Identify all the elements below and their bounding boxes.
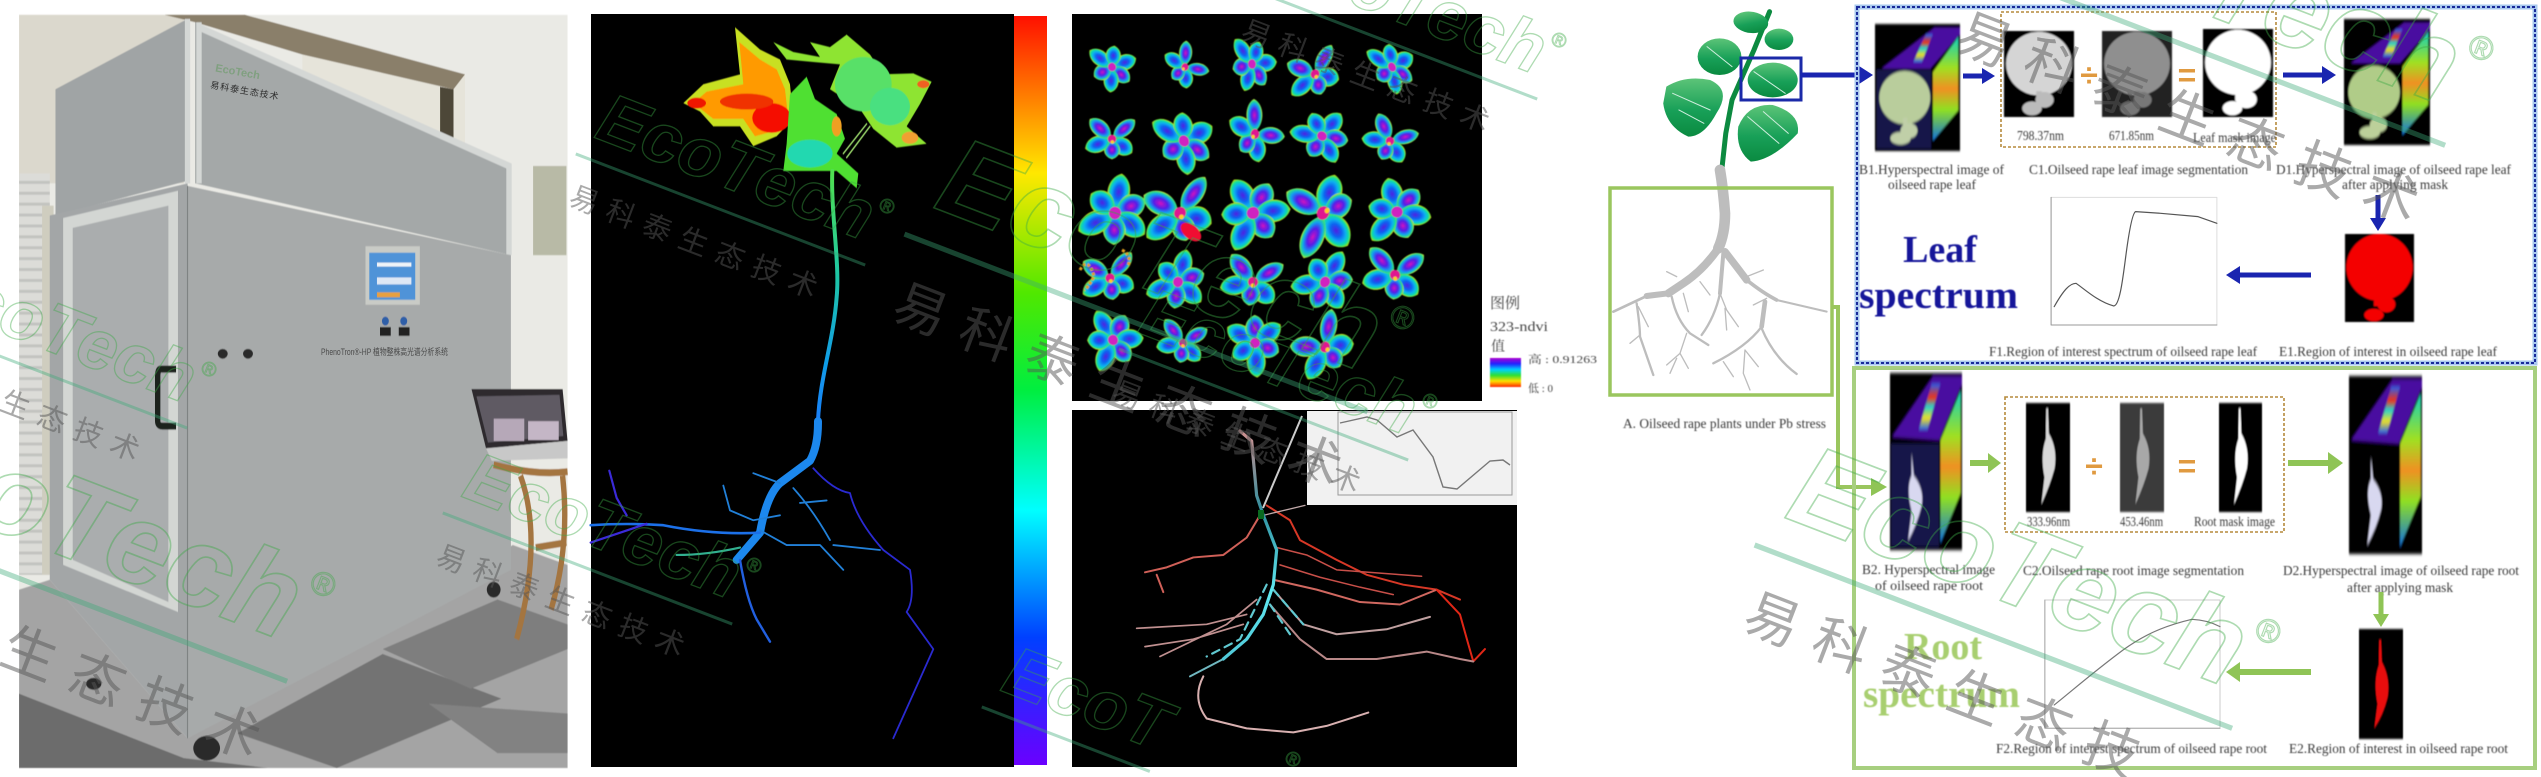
watermark: large right upper: ® — [2463, 26, 2499, 70]
arrow down — [2370, 195, 2386, 231]
arrow left — [2226, 662, 2311, 682]
captions row two: E2.Region of interest in oilseed rape root — [2289, 742, 2508, 757]
watermark: small over rosettes: ® — [1419, 389, 1441, 415]
C2 labels: Root mask image — [2194, 515, 2275, 530]
C1 labels: 671.85nm — [2109, 129, 2154, 144]
root spectrum title: spectrum — [1863, 673, 2020, 716]
D2 masked root cube — [2349, 376, 2422, 554]
watermark: top centre: 易科泰生态技术 — [1237, 14, 1503, 143]
pointer arrow — [1263, 416, 1302, 508]
watermark: small over plant panel top: EcoTech — [588, 78, 886, 255]
captions row one: of oilseed rape root — [1875, 579, 1983, 594]
stem — [1721, 12, 1770, 173]
machine brand plate — [210, 62, 283, 102]
watermark: small over plant panel roots: EcoTech — [455, 437, 753, 614]
captions row two: F2.Region of interest spectrum of oilseed rape root — [1996, 742, 2267, 757]
watermark: small over plant panel roots — [422, 434, 769, 680]
machine name label: PhenoTron®-HP 植物整株高光谱分析系统 — [321, 346, 448, 357]
touch screen — [365, 246, 420, 305]
watermark: top centre — [1227, 0, 1574, 155]
plant rosettes — [1064, 28, 1442, 390]
watermark: small over rosettes: EcoTech — [1131, 273, 1429, 450]
watermark: large across centre: ® — [1385, 297, 1420, 339]
C1 labels: Leaf mask image — [2193, 131, 2276, 146]
watermark: small over rosettes: 易科泰生态技术 — [1108, 375, 1374, 504]
watermark: small over photo: ® — [198, 357, 220, 383]
equals sign: = — [2178, 57, 2196, 93]
equals sign: = — [2178, 448, 2196, 484]
leaf spectrum title — [1859, 229, 2018, 317]
arrow down — [2373, 592, 2389, 627]
C2 root mask — [2219, 403, 2262, 512]
stem and roots — [591, 171, 933, 738]
watermark: small over plant panel top: 易科泰生态技术 — [565, 180, 831, 309]
root system — [1137, 431, 1485, 732]
legend: 图例 — [1490, 295, 1520, 312]
leaf veins — [1673, 47, 1788, 143]
legend: 低 : 0 — [1528, 382, 1554, 395]
divide sign: ÷ — [2085, 448, 2103, 484]
knobs and holes — [218, 317, 409, 359]
legend — [1490, 295, 1598, 395]
arrow — [1970, 453, 2001, 473]
panel: root spectrum workflow — [1854, 368, 2535, 768]
captions row one: after applying mask — [2347, 581, 2453, 596]
watermark: large across centre — [870, 107, 1428, 505]
machine brand plate: 易科泰生态技术 — [210, 79, 280, 102]
C2 labels: 333.96nm — [2027, 515, 2070, 530]
icon: machine upper left cover — [55, 19, 188, 216]
watermark: small over plant panel top — [555, 75, 902, 321]
panel: workflow plant illustration — [1663, 9, 1798, 173]
C1 image 798 nm — [2004, 31, 2074, 117]
C2 image one — [2026, 403, 2070, 512]
captions row one: B1.Hyperspectral image of — [1859, 163, 2004, 178]
C2 image two — [2120, 403, 2164, 512]
box: roots frame — [1610, 188, 1832, 395]
root spectrum title: Root — [1904, 626, 1982, 668]
door handle — [158, 369, 176, 426]
F2 spectrum chart — [2045, 600, 2220, 728]
panel: instrument photo — [19, 15, 568, 768]
watermark: large over photo — [0, 367, 350, 777]
captions row two — [1989, 345, 2497, 360]
gray root system — [1613, 170, 1827, 390]
watermark: small over plant panel roots: ® — [743, 553, 765, 579]
captions row two: E1.Region of interest in oilseed rape leaf — [2279, 345, 2497, 360]
caption A: A. Oilseed rape plants under Pb stress — [1623, 417, 1826, 432]
captions row one: C2.Oilseed rape root image segmentation — [2023, 564, 2244, 579]
watermark: large right lower — [1721, 414, 2293, 777]
captions row two: F1.Region of interest spectrum of oilseed rape leaf — [1989, 345, 2257, 360]
watermark: large across centre: EcoTech — [923, 113, 1400, 395]
captions row one: D2.Hyperspectral image of oilseed rape root — [2283, 564, 2519, 579]
aluminium frame — [188, 19, 509, 255]
C1 labels: 798.37nm — [2017, 129, 2064, 144]
watermark: large across centre: 易科泰生态技术 — [885, 274, 1366, 505]
C1 labels — [2017, 129, 2276, 146]
colour scale bar — [1014, 16, 1047, 765]
machine brand plate: EcoTech — [214, 62, 261, 82]
captions row two — [1996, 742, 2508, 757]
captions row one: B2. Hyperspectral image — [1862, 563, 1995, 578]
F1 spectrum chart — [2051, 197, 2217, 325]
selection dot — [1258, 510, 1264, 519]
leaves — [683, 27, 932, 188]
arrow — [1963, 68, 1995, 84]
table — [494, 465, 568, 639]
watermark: large right lower: ® — [2250, 609, 2286, 653]
divide sign: ÷ — [2080, 57, 2098, 93]
captions row one: C1.Oilseed rape leaf image segmentation — [2029, 163, 2248, 178]
E2 root ROI — [2359, 629, 2403, 739]
panel: whole plant NDVI map — [591, 14, 1047, 767]
machine front panel — [188, 186, 511, 738]
watermark: small lower centre — [982, 628, 1308, 777]
box: selected leaf — [1741, 58, 1801, 100]
captions row one: D1.Hyperspectral image of oilseed rape leaf — [2276, 163, 2511, 178]
E1 leaf ROI — [2345, 234, 2414, 322]
B1 hyperspectral cube — [1875, 24, 1960, 151]
spectrum inset — [1307, 411, 1517, 505]
leaf spectrum title: spectrum — [1859, 274, 2018, 317]
leaf spectrum title: Leaf — [1903, 229, 1978, 271]
panel: root image with spectrum inset — [1072, 410, 1517, 767]
panel: leaf spectrum workflow — [1857, 7, 2535, 363]
captions row one — [1859, 163, 2511, 193]
arrow — [2288, 452, 2343, 474]
watermark: small over plant panel top: ® — [876, 194, 898, 220]
C2 labels: 453.46nm — [2120, 515, 2163, 530]
watermark: top centre: ® — [1548, 28, 1570, 54]
watermark: large right upper: 易科泰生态技术 — [1948, 2, 2444, 241]
panel: multi-plant NDVI image — [1064, 14, 1482, 401]
watermark: small over plant panel roots: 易科泰生态技术 — [432, 539, 698, 668]
wheels — [86, 582, 501, 761]
root spectrum title — [1863, 626, 2020, 716]
watermark: large over photo: ® — [305, 562, 341, 606]
watermark: small lower centre: EcoT — [994, 631, 1186, 767]
watermark: small over photo — [0, 238, 224, 484]
C1 image 671 nm — [2102, 31, 2172, 117]
C2 segmentation box — [2005, 397, 2284, 532]
leaves — [1663, 9, 1798, 162]
arrow left — [2226, 266, 2311, 284]
legend: 高 : 0.91263 — [1528, 352, 1598, 366]
arrow — [2283, 66, 2336, 84]
machine side — [50, 183, 188, 738]
C1 leaf mask — [2203, 29, 2273, 117]
captions row one — [1862, 563, 2519, 596]
legend: 323-ndvi — [1490, 320, 1548, 335]
D1 masked cube — [2344, 19, 2430, 145]
machine upper right cover — [195, 22, 511, 255]
B2 root cube — [1890, 373, 1962, 550]
watermark: small lower centre: ® — [1282, 747, 1304, 773]
watermark: large right lower: EcoTech — [1774, 420, 2266, 711]
door — [63, 191, 178, 612]
C1 segmentation box — [2001, 12, 2276, 147]
captions row one: oilseed rape leaf — [1888, 178, 1976, 193]
legend: 值 — [1491, 338, 1505, 355]
laptop — [471, 389, 568, 461]
C2 labels — [2027, 515, 2275, 530]
watermark: small over rosettes — [1098, 270, 1445, 516]
captions row one: after applying mask — [2342, 178, 2448, 193]
arrow: leaf to B1 — [1801, 66, 1873, 84]
connector green to root panel — [1832, 307, 1887, 496]
